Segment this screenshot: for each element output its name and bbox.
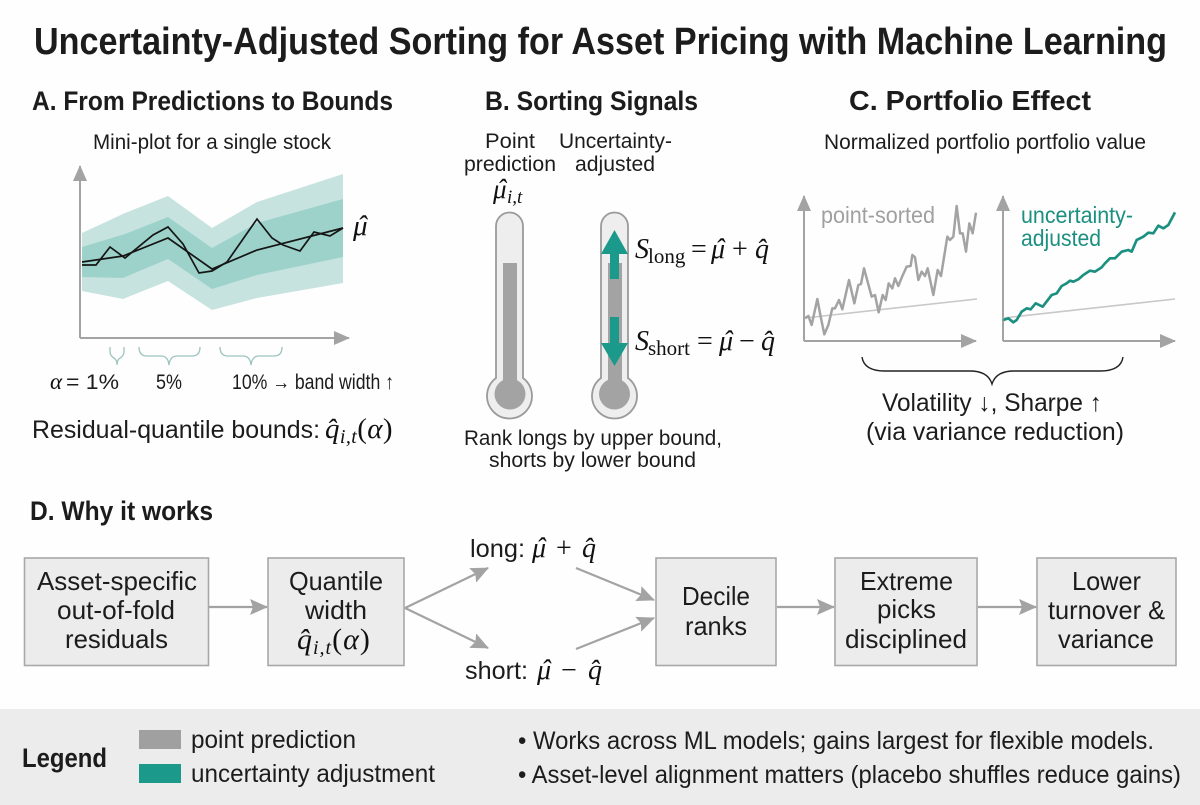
legend band bbox=[0, 709, 1200, 805]
heading: panel C: C. Portfolio Effect bbox=[849, 85, 1091, 116]
column label: point prediction: μ bbox=[493, 174, 507, 204]
label: long: q̂ bbox=[582, 533, 596, 564]
box: residuals bbox=[24, 558, 208, 666]
caption: volatility and Sharpe: (via variance reduction) bbox=[866, 418, 1124, 446]
box: residuals: residuals bbox=[65, 624, 168, 654]
formula: residual-quantile bounds: Residual-quantile bounds: bbox=[32, 416, 320, 444]
arrow: extreme to lower turnover bbox=[978, 606, 1036, 608]
chart: prediction bands: μ bbox=[353, 210, 368, 242]
formula: S long: ˆ bbox=[715, 234, 726, 265]
arrow: up bbox=[601, 230, 628, 279]
box: quantile width: α) bbox=[343, 623, 371, 656]
notes: • Works across ML models; gains largest for flexible models. bbox=[518, 727, 1154, 755]
column label: uncertainty-adjusted: adjusted bbox=[575, 153, 655, 176]
subtitle: mini-plot: Mini-plot for a single stock bbox=[93, 131, 331, 154]
arrow: decile to extreme bbox=[777, 606, 834, 608]
panel: B. Sorting Signals bbox=[464, 86, 775, 472]
panel: A. From Predictions to Bounds bbox=[32, 86, 394, 448]
brace: combined effect bbox=[862, 357, 1123, 384]
chart: point-sorted bbox=[804, 196, 977, 341]
chart: uncertainty-adjusted bbox=[1003, 196, 1175, 341]
label: long: + bbox=[556, 533, 572, 564]
box: quantile width: ( bbox=[332, 623, 343, 656]
column label: point prediction: Point bbox=[485, 130, 535, 153]
brackets: alpha levels bbox=[110, 347, 282, 365]
box: residuals: Asset-specific bbox=[37, 566, 197, 596]
formula: S short: − bbox=[739, 326, 755, 357]
formula: S long: = bbox=[691, 234, 707, 265]
label: short: μ bbox=[537, 655, 551, 686]
arrow: residuals to width bbox=[209, 606, 267, 608]
label: short: q̂ bbox=[588, 655, 602, 686]
arrow: down bbox=[601, 317, 628, 366]
formula: S short: ˆ bbox=[723, 326, 734, 357]
box: decile ranks: ranks bbox=[685, 611, 747, 641]
formula: residual-quantile bounds: ( bbox=[357, 413, 367, 445]
subtitle: normalized value: Normalized portfolio portfolio value bbox=[824, 131, 1146, 154]
labels: alpha levels bbox=[50, 369, 394, 394]
column label: uncertainty-adjusted: Uncertainty- bbox=[559, 130, 672, 153]
box: extreme picks: disciplined bbox=[845, 624, 967, 654]
formula: residual-quantile bounds: α) bbox=[367, 413, 393, 445]
box: decile ranks: Decile bbox=[682, 581, 750, 611]
box: extreme picks: picks bbox=[877, 594, 936, 624]
box: quantile width: q̂ bbox=[297, 623, 313, 656]
heading: panel D: D. Why it works bbox=[30, 496, 213, 526]
box: quantile width bbox=[268, 558, 404, 666]
notes bbox=[518, 727, 1181, 789]
formula: S short: = bbox=[697, 326, 713, 357]
notes: • Asset-level alignment matters (placebo shuffles reduce gains) bbox=[518, 761, 1181, 789]
column label: point prediction: prediction bbox=[464, 153, 556, 176]
swatch: uncertainty adjustment: uncertainty adjustment bbox=[191, 760, 435, 788]
chart: uncertainty-adjusted: uncertainty- bbox=[1021, 202, 1133, 228]
box: quantile width: width bbox=[304, 595, 367, 625]
box: extreme picks: Extreme bbox=[860, 566, 953, 596]
label: long: μ bbox=[532, 533, 546, 564]
labels: alpha levels: 10% → band width ↑ bbox=[232, 371, 394, 394]
label: long: ˆ bbox=[536, 533, 547, 564]
panel: D. Why it works bbox=[24, 496, 1176, 686]
box: residuals: out-of-fold bbox=[57, 595, 175, 625]
labels: alpha levels: = 1% bbox=[66, 371, 119, 394]
chart: uncertainty-adjusted: adjusted bbox=[1021, 225, 1101, 251]
label: long bbox=[470, 533, 596, 564]
box: extreme picks bbox=[835, 558, 977, 666]
caption: volatility and Sharpe bbox=[866, 389, 1124, 446]
arrow: width to short bbox=[405, 608, 488, 648]
swatch: point prediction: point prediction bbox=[191, 726, 356, 754]
label: short: − bbox=[561, 655, 577, 686]
box: lower turnover: turnover & bbox=[1048, 595, 1165, 625]
caption: ranking rule: shorts by lower bound bbox=[489, 449, 696, 472]
column label: point prediction: ˆ bbox=[497, 174, 508, 204]
label: short: short: bbox=[465, 657, 528, 685]
chart: point-sorted: point-sorted bbox=[821, 202, 935, 228]
arrow: long to decile bbox=[576, 568, 654, 600]
label: long: long: bbox=[470, 535, 525, 563]
formula: S short: q̂ bbox=[761, 326, 775, 357]
column label: point prediction bbox=[464, 130, 556, 208]
formula: S long: long bbox=[648, 244, 686, 268]
caption: volatility and Sharpe: Volatility ↓, Sharpe ↑ bbox=[882, 389, 1102, 417]
panel: C. Portfolio Effect bbox=[804, 85, 1175, 446]
heading: panel A: A. From Predictions to Bounds bbox=[32, 86, 393, 116]
thermometer: point prediction bbox=[487, 213, 532, 419]
labels: alpha levels: α bbox=[50, 369, 63, 394]
formula: S long: q̂ bbox=[755, 234, 769, 265]
chart: prediction bands: ˆ bbox=[357, 210, 368, 242]
formula: residual-quantile bounds: i,t bbox=[340, 426, 357, 448]
formula: S long: S bbox=[635, 234, 649, 265]
formula: S short: short bbox=[648, 336, 690, 360]
column label: uncertainty-adjusted bbox=[559, 130, 672, 176]
box: quantile width: i,t bbox=[313, 637, 332, 659]
chart: prediction bands bbox=[80, 166, 368, 338]
box: lower turnover bbox=[1037, 558, 1176, 666]
caption: ranking rule: Rank longs by upper bound, bbox=[464, 427, 722, 450]
formula: residual-quantile bounds bbox=[32, 413, 393, 448]
thermometer: uncertainty-adjusted bbox=[592, 213, 637, 419]
column label: point prediction: i,t bbox=[507, 187, 523, 208]
formula: S short: μ bbox=[718, 326, 733, 357]
formula: residual-quantile bounds: q̂ bbox=[325, 413, 340, 445]
labels: alpha levels: 5% bbox=[156, 371, 182, 394]
arrow: width to long bbox=[405, 568, 488, 608]
arrow: short to decile bbox=[576, 618, 654, 649]
legend title: Legend bbox=[22, 743, 107, 773]
formula: S long: + bbox=[732, 234, 748, 265]
box: lower turnover: Lower bbox=[1072, 566, 1141, 596]
caption: ranking rule bbox=[464, 427, 722, 472]
label: short: ˆ bbox=[541, 655, 552, 686]
label: short bbox=[465, 655, 602, 686]
box: quantile width: Quantile bbox=[289, 566, 383, 596]
box: lower turnover: variance bbox=[1058, 624, 1154, 654]
formula: S long: μ bbox=[710, 234, 725, 265]
box: decile ranks bbox=[656, 558, 776, 666]
heading: panel B: B. Sorting Signals bbox=[485, 86, 698, 116]
formula: S short: S bbox=[635, 326, 649, 357]
